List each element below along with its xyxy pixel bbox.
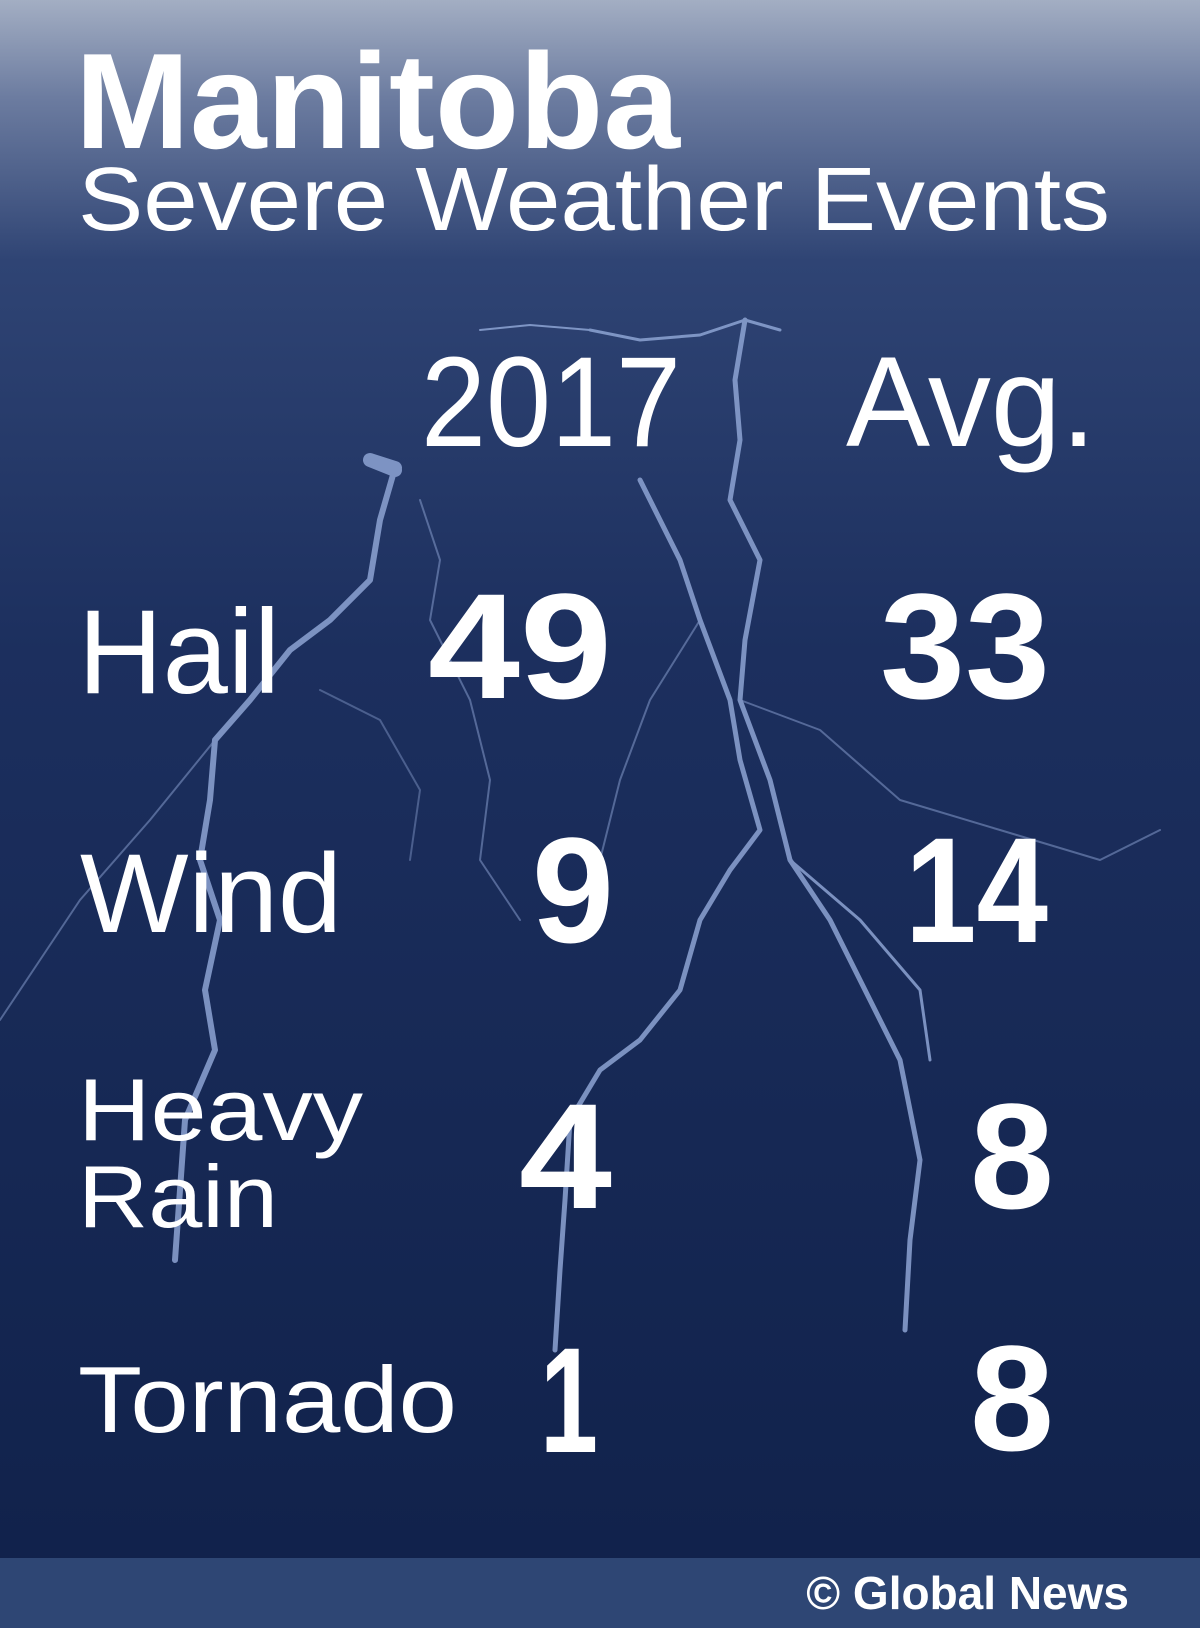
- row: Tornado: 1: [540, 1316, 598, 1484]
- column header: Avg.: Avg.: [846, 331, 1096, 474]
- footer credit: © Global News: [806, 1567, 1129, 1619]
- row: Wind: 14: [905, 806, 1048, 974]
- subtitle: Severe Weather Events: [78, 150, 1110, 250]
- column header: 2017: 2017: [421, 331, 681, 474]
- row: Heavy Rain: 8: [970, 1072, 1054, 1240]
- row: Tornado: Tornado: [78, 1347, 457, 1452]
- row: Tornado: [78, 1314, 1054, 1484]
- row: Wind: [80, 806, 1048, 974]
- row: Heavy Rain: Rain: [78, 1147, 278, 1246]
- row: Heavy Rain: [78, 1060, 1054, 1246]
- row: Hail: Hail: [78, 585, 280, 719]
- row: Heavy Rain: Heavy: [78, 1060, 363, 1159]
- row: Wind: 9: [532, 806, 614, 974]
- row: Tornado: 8: [970, 1314, 1054, 1482]
- row: Hail: [78, 562, 1050, 730]
- lightning: [0, 320, 1160, 1350]
- row: Hail: 33: [880, 562, 1050, 730]
- row: Heavy Rain: 4: [519, 1072, 612, 1240]
- footer bar: [0, 1558, 1200, 1628]
- row: Hail: 49: [428, 562, 612, 730]
- title: Manitoba: [75, 25, 681, 177]
- row: Wind: Wind: [80, 831, 342, 956]
